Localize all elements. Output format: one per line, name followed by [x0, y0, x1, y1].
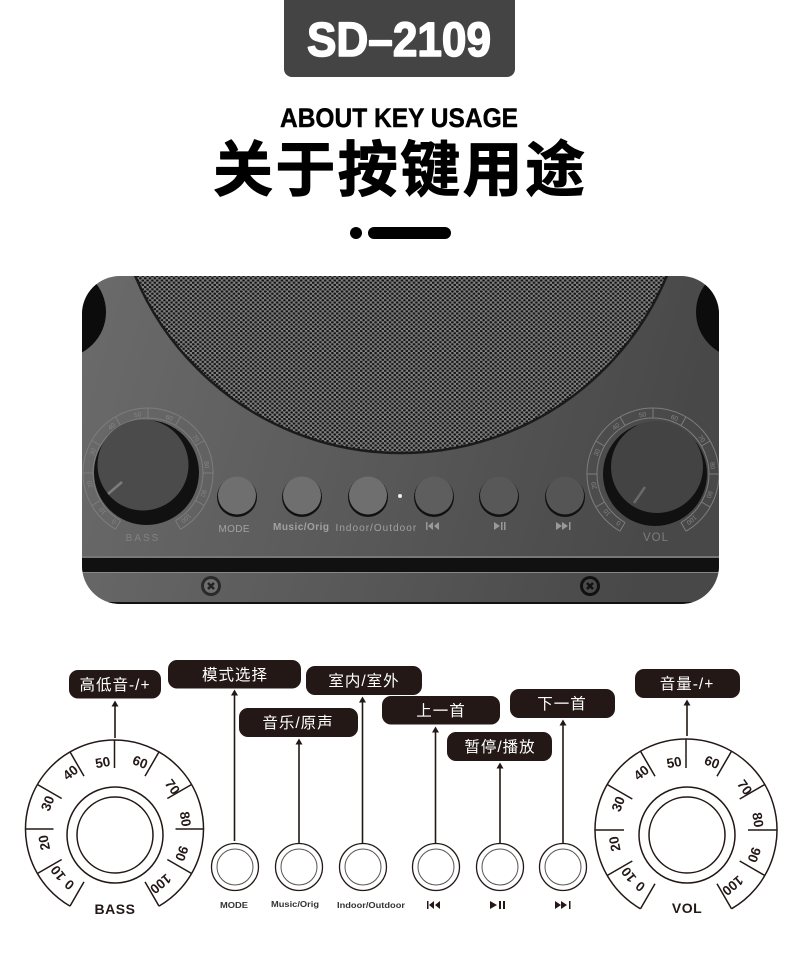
- small button labels: [220, 899, 570, 910]
- volume dial diagram: 100: [719, 873, 746, 899]
- bass knob with scale: 50: [134, 411, 142, 419]
- photo button labels: [126, 522, 668, 541]
- volume knob with scale: 100: [685, 513, 698, 526]
- arrow: previous: [432, 726, 439, 843]
- small button labels: MODE: [220, 900, 248, 910]
- arrow: music original: [296, 738, 302, 843]
- volume knob with scale: 80: [708, 462, 716, 470]
- bass knob with scale: 40: [107, 422, 117, 432]
- bass knob with scale: 10: [98, 505, 108, 516]
- corner handle left: [82, 284, 106, 352]
- volume dial diagram: 60: [702, 753, 722, 772]
- volume dial diagram: 50: [665, 754, 683, 771]
- volume dial diagram: 10: [618, 864, 639, 885]
- bass dial diagram: 40: [60, 762, 81, 783]
- callout: music original: 音乐/原声: [262, 714, 334, 732]
- corner handle right: [696, 284, 719, 352]
- small button labels: Music/Orig: [271, 899, 319, 909]
- bass dial diagram: BASS: [95, 901, 135, 917]
- bass knob with scale: [83, 408, 213, 529]
- volume knob with scale: 0: [615, 519, 622, 527]
- english heading: ABOUT KEY USAGE: [280, 103, 518, 133]
- bass dial diagram: 10: [48, 862, 69, 884]
- small button labels: Indoor/Outdoor: [337, 900, 406, 910]
- volume dial diagram: [595, 739, 777, 916]
- arrow: volume: [684, 700, 690, 736]
- bass knob with scale: 100: [179, 512, 192, 524]
- volume knob with scale: 60: [670, 414, 679, 423]
- indicator LED: [398, 494, 402, 498]
- bass knob with scale: 30: [89, 447, 98, 457]
- volume dial diagram: 0: [633, 878, 648, 895]
- photo button labels: MODE: [218, 524, 250, 535]
- volume dial diagram: 80: [749, 811, 766, 828]
- callout: mode: [168, 660, 301, 688]
- model badge: [284, 0, 515, 77]
- arrow: mode: [231, 690, 238, 841]
- volume knob with scale: 30: [593, 448, 602, 457]
- model badge: SD–2109: [307, 14, 491, 67]
- arrow: indoor outdoor: [359, 696, 366, 843]
- title divider: [350, 227, 451, 239]
- bass dial diagram: 90: [172, 844, 191, 863]
- photo button labels: VOL: [643, 532, 669, 544]
- arrow: bass: [112, 700, 118, 738]
- callout: volume: 音量-/+: [660, 675, 714, 693]
- callout: play pause: 暂停/播放: [464, 738, 536, 756]
- speaker grille: [134, 276, 668, 454]
- volume dial diagram: 70: [734, 777, 755, 798]
- volume dial diagram: 40: [631, 762, 652, 783]
- bass dial diagram: 20: [36, 834, 53, 851]
- chinese title: 关于按键用途: [213, 137, 585, 204]
- callout: indoor outdoor: [306, 666, 422, 695]
- bass knob with scale: 90: [198, 488, 207, 498]
- callout: mode: 模式选择: [202, 666, 268, 684]
- volume dial diagram: 90: [745, 845, 764, 864]
- callout: previous: 上一首: [416, 702, 466, 720]
- arrow: next: [560, 720, 566, 843]
- volume knob with scale: 70: [696, 434, 706, 444]
- panel: speaker photo: [82, 276, 719, 604]
- volume knob with scale: 40: [611, 422, 622, 432]
- bass dial diagram: 80: [177, 811, 194, 828]
- volume dial diagram: 20: [606, 835, 624, 853]
- callout: volume: [635, 669, 740, 698]
- volume dial diagram: VOL: [672, 900, 702, 916]
- black trim band: [82, 556, 719, 604]
- photo button labels: BASS: [126, 533, 160, 544]
- photo buttons: [217, 476, 585, 517]
- bass dial diagram: [26, 740, 204, 917]
- callout: indoor outdoor: 室内/室外: [328, 672, 400, 690]
- bass dial diagram: 100: [147, 871, 174, 897]
- callout: music original: [239, 708, 358, 737]
- bass dial diagram: 70: [162, 776, 183, 797]
- callout: previous: [382, 696, 500, 724]
- bass dial diagram: 60: [130, 753, 150, 772]
- bass knob with scale: 70: [190, 434, 201, 444]
- bass knob with scale: 0: [111, 517, 118, 525]
- bass knob with scale: 20: [86, 480, 95, 488]
- callout: bass: [69, 670, 161, 698]
- screw left: [201, 576, 221, 596]
- volume knob with scale: 20: [590, 481, 599, 490]
- small button diagrams: [212, 844, 586, 890]
- photo button labels: Indoor/Outdoor: [336, 523, 417, 534]
- bass dial diagram: 30: [38, 794, 57, 813]
- screw right: [580, 576, 600, 596]
- bass dial diagram: 0: [62, 876, 77, 893]
- photo button labels: Music/Orig: [273, 522, 329, 533]
- callout: bass: 高低音-/+: [79, 676, 151, 694]
- volume knob with scale: 10: [602, 507, 612, 517]
- volume knob with scale: 90: [704, 490, 713, 499]
- callout: next: [510, 689, 615, 718]
- bass dial diagram: 50: [94, 754, 111, 771]
- arrow: play pause: [496, 762, 504, 843]
- callout: play pause: [447, 732, 552, 761]
- bass knob with scale: 80: [202, 461, 210, 469]
- volume knob with scale: [587, 408, 719, 531]
- volume dial diagram: 30: [609, 794, 628, 814]
- volume knob with scale: 50: [638, 411, 647, 419]
- bass knob with scale: 60: [164, 414, 174, 423]
- callout: next: 下一首: [537, 695, 587, 713]
